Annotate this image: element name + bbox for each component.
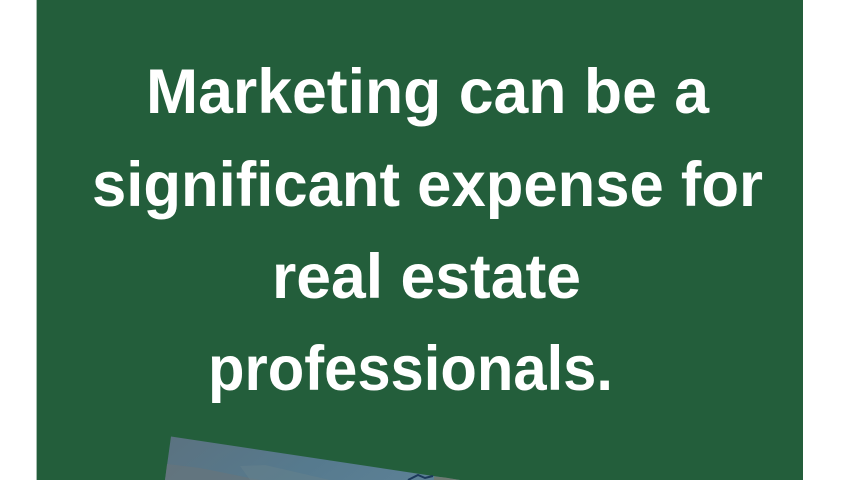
heading: marketing expense statement: significant expense for: [92, 150, 763, 220]
heading: marketing expense statement: [92, 57, 763, 404]
heading: marketing expense statement: Marketing can be a: [146, 57, 710, 127]
image: tilted photo, cropped at the bottom edge: [165, 436, 460, 480]
heading: marketing expense statement: professionals.: [208, 334, 613, 404]
heading: marketing expense statement: real estate: [272, 242, 581, 312]
